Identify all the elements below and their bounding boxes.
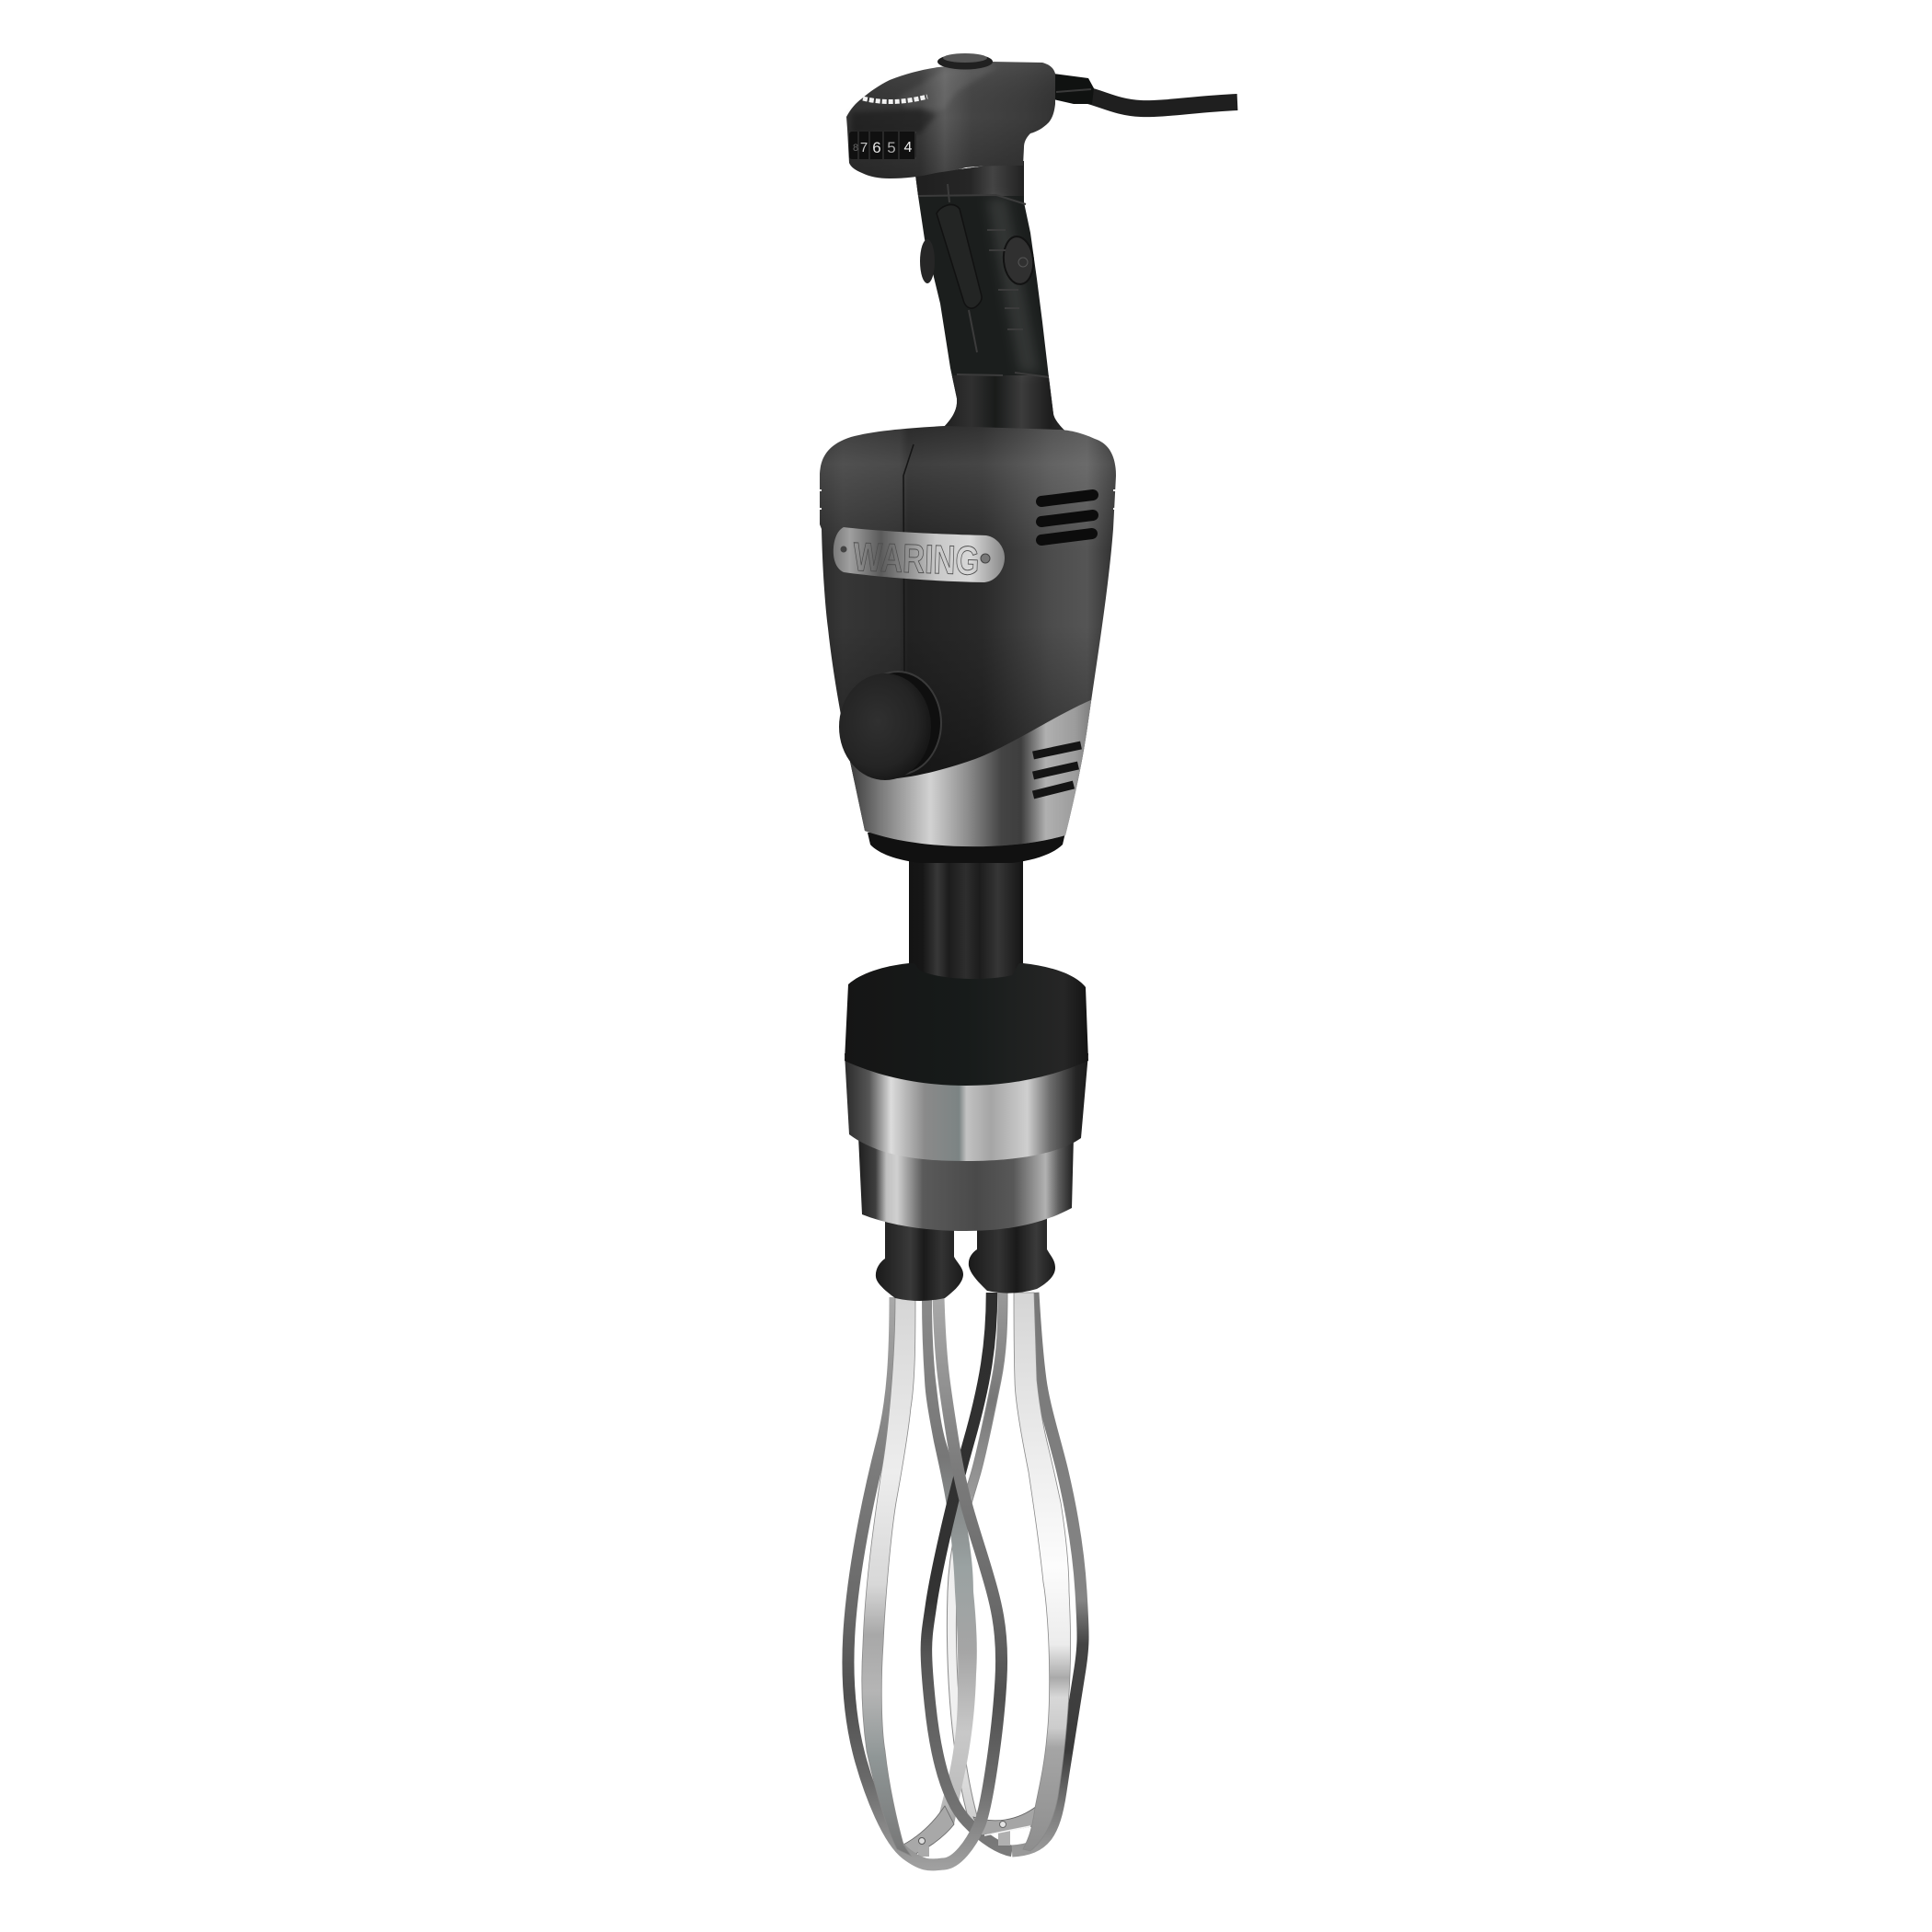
right whisk front strip: [1014, 1293, 1071, 1851]
neck and collar: [868, 833, 1065, 975]
lower steel band: [858, 1136, 1074, 1231]
nameplate: WARING: [853, 535, 980, 584]
whisk wires: [848, 1293, 1083, 1865]
right whisk outer strip: [1012, 1293, 1083, 1851]
nameplate: [834, 527, 1005, 584]
top button: [937, 53, 993, 70]
product illustration: immersion blender with whisk attachment: [820, 53, 1238, 1871]
right whisk back strip: [926, 1293, 1012, 1851]
handle grip: [915, 161, 1064, 431]
right whisk crossbar: [973, 1806, 1037, 1835]
side notches: [818, 490, 1118, 509]
power button: [1001, 235, 1036, 286]
dial knob: [839, 672, 941, 780]
silver lower band: [850, 699, 1091, 846]
lower vents: [1033, 745, 1081, 795]
right whisk inner strip: [951, 1293, 1003, 1826]
head ridge: [899, 66, 998, 110]
left whisk rivet: [918, 1838, 929, 1857]
handle head: [846, 53, 1055, 178]
right stem: [969, 1214, 1055, 1294]
left whisk inner wide strip: [922, 1297, 977, 1843]
grip slot: [937, 205, 982, 308]
motor body: [814, 423, 1122, 851]
shadow above dial: [851, 109, 937, 133]
speed dial: 6: [872, 139, 881, 156]
whisk shaft housing: [845, 957, 1088, 1231]
lower neck ribs: [909, 957, 1023, 979]
speed dial: 7: [860, 140, 868, 155]
left whisk crossbar: [903, 1806, 954, 1856]
body seam: [903, 444, 914, 672]
right whisk rivet post: [998, 1829, 1010, 1846]
left stem: [876, 1214, 963, 1301]
speed dial: 4: [904, 140, 913, 155]
left whisk narrow loop: [848, 1297, 1002, 1865]
upper steel band: [845, 1053, 1088, 1161]
upper vents: [1041, 495, 1093, 540]
speed dial: 5: [887, 139, 896, 156]
grip lines: [918, 184, 1049, 377]
black cap: [845, 963, 1088, 1086]
cord strain relief: [1053, 74, 1094, 104]
whisk stems: [876, 1214, 1055, 1301]
side button: [920, 239, 935, 283]
power cord: [1053, 74, 1237, 109]
speed dial: [849, 132, 916, 159]
speed dial: 8: [853, 143, 858, 154]
logo marks: [863, 97, 927, 102]
left whisk front strip: [862, 1297, 915, 1856]
